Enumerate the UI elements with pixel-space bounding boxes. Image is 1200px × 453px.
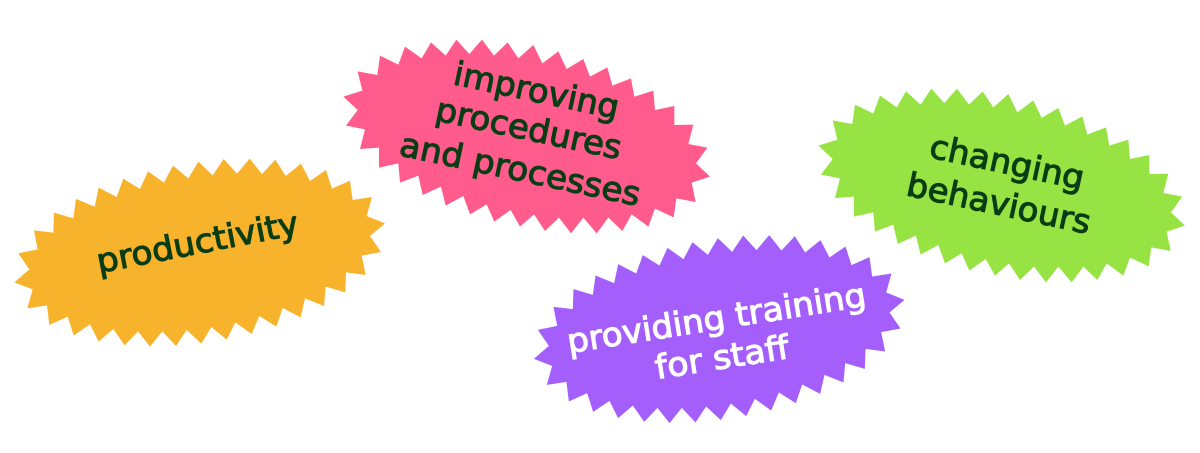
starburst: improving procedures and processes: and processes [396,125,644,214]
starburst: improving procedures and processes [343,40,710,233]
starburst: providing training for staff: providing training [564,275,869,361]
starburst: productivity: productivity [93,203,302,281]
starburst: changing behaviours: changing [926,127,1088,197]
starburst: changing behaviours [818,89,1185,282]
starburst: improving procedures and processes: procedures [432,90,625,167]
starburst: changing behaviours: behaviours [903,165,1094,242]
starburst: providing training for staff [534,235,904,423]
starburst: improving procedures and processes: improving [450,54,623,127]
starburst: productivity [14,159,385,347]
starburst: providing training for staff: for staff [652,327,793,387]
